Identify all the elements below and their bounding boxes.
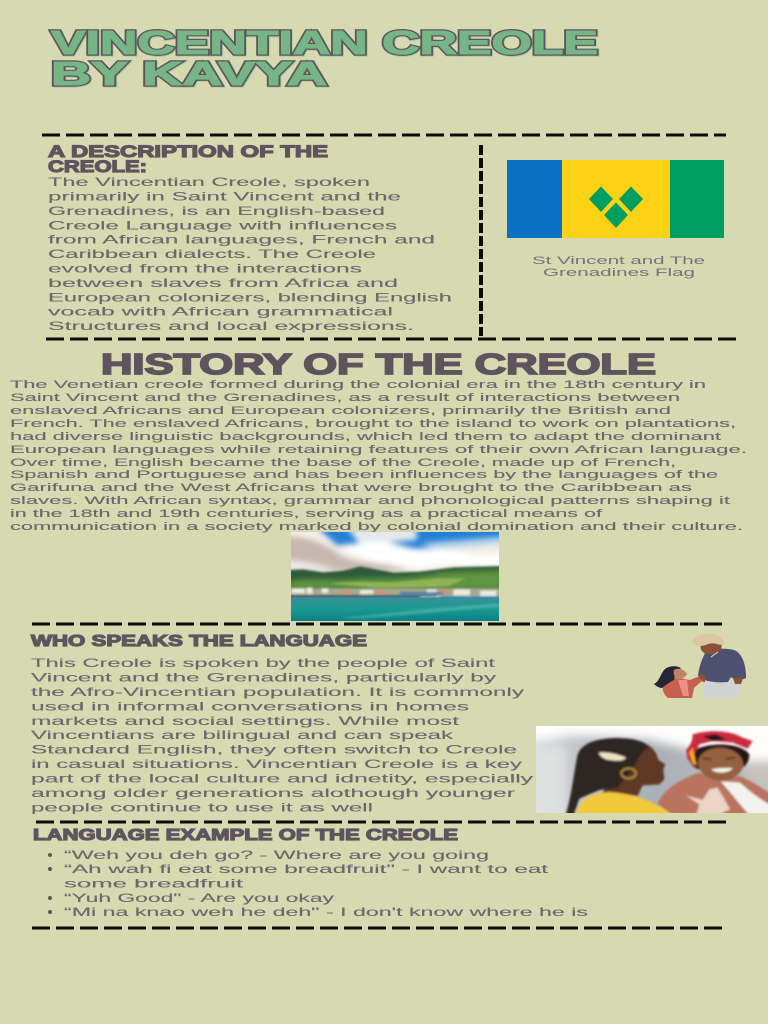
panel: language examples — [33, 827, 588, 919]
text block: description body: between slaves from Africa and — [48, 276, 398, 290]
text block: description body: European colonizers, blending English — [48, 290, 452, 304]
text block: description body: vocab with African grammatical — [48, 304, 393, 318]
text block: history body: Saint Vincent and the Grenadines, as a result of interactions between — [10, 392, 680, 404]
icon: adult holding child's hand — [654, 634, 746, 698]
text block: history body: European languages while retaining features of their own African language. — [10, 444, 747, 456]
text block: history body: Spanish and Portuguese and has been influences by the languages of the — [10, 469, 718, 481]
woman on the right — [657, 731, 768, 819]
text block: who speaks body: Vincent and the Grenadines, particularly by — [31, 670, 496, 684]
heading: who speaks: WHO SPEAKS THE LANGUAGE — [31, 633, 367, 650]
title: VINCENTIAN CREOLE — [51, 24, 598, 61]
title: VINCENTIAN CREOLE — [52, 25, 599, 62]
text block: who speaks body: the Afro-Vincentian population. It is commonly — [31, 685, 524, 699]
text block: history body: The Venetian creole formed during the colonial era in the 18th century in — [10, 379, 706, 391]
text block: who speaks body — [31, 656, 533, 814]
text block: description body: Caribbean dialects. The Creole — [48, 247, 377, 261]
title: BY KAVYA — [52, 56, 328, 93]
list: creole example phrases: “Weh you deh go? - Where are you going — [64, 848, 489, 862]
adult figure — [692, 634, 746, 698]
text block: history body: communication in a society marked by colonial domination and their culture. — [10, 521, 743, 533]
text block: who speaks body: markets and social settings. While most — [31, 714, 460, 728]
photo: Saint Vincent harbour — [291, 532, 499, 621]
title — [51, 24, 599, 93]
heading: history of the creole: HISTORY OF THE CREOLE — [101, 349, 656, 381]
list: creole example phrases: “Mi na knao weh he deh" - I don't know where he is — [64, 905, 588, 919]
child figure — [654, 666, 703, 698]
flag caption: Grenadines Flag — [543, 267, 695, 279]
text block: description body: primarily in Saint Vincent and the — [48, 190, 402, 204]
text block: who speaks body: Standard English, they often switch to Creole — [31, 742, 518, 756]
flag caption: St Vincent and The — [532, 255, 705, 267]
title: VINCENTIAN CREOLE — [51, 24, 598, 61]
panel: description of the creole — [48, 142, 452, 333]
text block: who speaks body: Vincentians are bilingual and can speak — [31, 728, 455, 742]
text block: history body: in the 18th and 19th centuries, serving as a practical means of — [10, 508, 604, 520]
heading: description: A DESCRIPTION OF THE — [48, 142, 328, 161]
text block: history body: slaves. With African syntax, grammar and phonological patterns shaping it — [10, 495, 730, 507]
panel: who speaks the language — [31, 633, 533, 814]
heading: description — [48, 142, 328, 176]
flag caption — [532, 255, 705, 279]
title: BY KAVYA — [51, 55, 327, 92]
text block: history body: French. The enslaved Africans, brought to the island to work on plantations, — [10, 418, 736, 430]
text block: history body: had diverse linguistic backgrounds, which led them to adapt the dominant — [10, 431, 721, 443]
text block: history body: Garifuna and the West Africans that were brought to the Caribbean as — [10, 482, 693, 494]
list: creole example phrases — [48, 848, 588, 919]
text block: description body: Creole Language with influences — [48, 218, 397, 232]
heading: language example: LANGUAGE EXAMPLE OF THE CREOLE — [33, 827, 458, 844]
text block: description body: Grenadines, is an English-based — [48, 204, 385, 218]
icon: St Vincent and the Grenadines flag — [507, 160, 724, 238]
text block: description body: evolved from the interactions — [48, 262, 362, 276]
text block: description body — [48, 175, 452, 333]
title: BY KAVYA — [51, 55, 327, 92]
text block: description body: from African languages, French and — [48, 232, 435, 246]
text block: description body: Structures and local expressions. — [48, 319, 414, 333]
text block: description body: The Vincentian Creole, spoken — [48, 175, 370, 189]
heading: description: CREOLE: — [48, 157, 147, 176]
photo: two women talking — [536, 726, 768, 813]
list: creole example phrases: “Yuh Good" - Are you okay — [64, 891, 334, 905]
text block: who speaks body: part of the local culture and idnetity, especially — [31, 772, 533, 786]
text block: who speaks body: in casual situations. Vincentian Creole is a key — [31, 757, 522, 771]
text block: history body — [10, 379, 747, 533]
text block: who speaks body: among older generations alothough younger — [31, 786, 515, 800]
text block: history body: Over time, English became the base of the Creole, made up of French, — [10, 457, 676, 469]
text block: history body: enslaved Africans and European colonizers, primarily the British and — [10, 405, 671, 417]
woman on the left — [564, 736, 672, 813]
text block: who speaks body: used in informal conversations in homes — [31, 700, 469, 714]
text block: who speaks body: people continue to use it as well — [31, 800, 373, 814]
text block: who speaks body: This Creole is spoken by the people of Saint — [31, 656, 496, 670]
list: creole example phrases: some breadfruit — [64, 876, 244, 890]
list: creole example phrases: “Ah wah fi eat some breadfruit" - I want to eat — [64, 862, 549, 876]
